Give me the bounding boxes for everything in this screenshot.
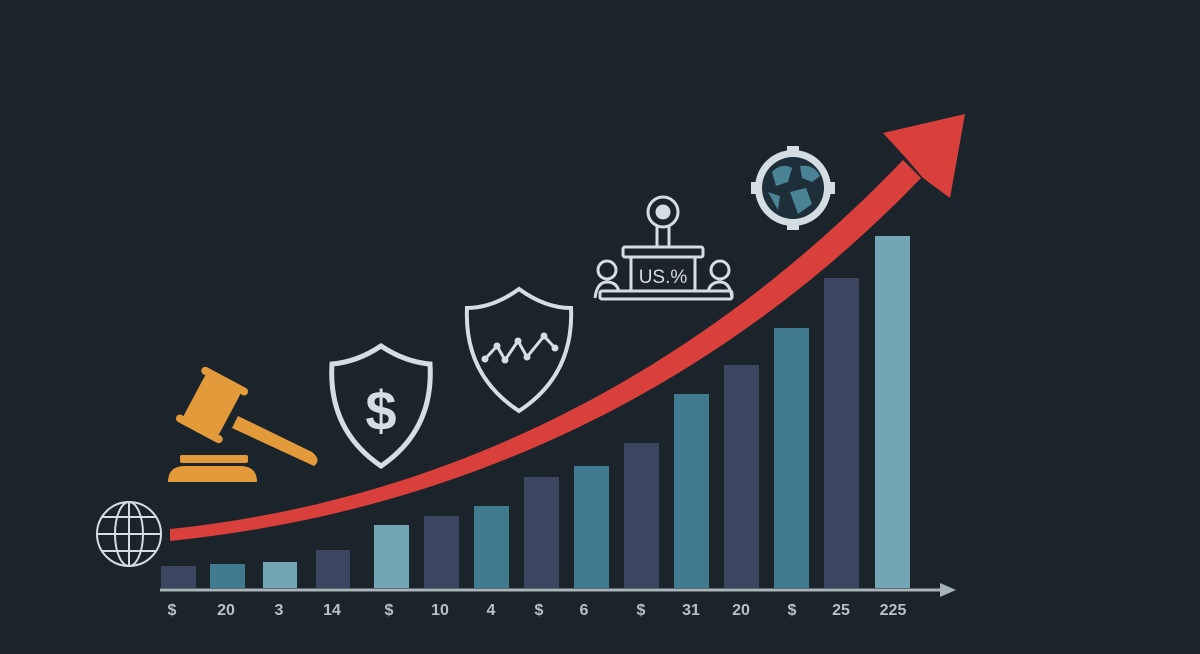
icon: stamp US.% with people: US.%	[639, 267, 687, 288]
axis labels: $	[637, 602, 646, 619]
icon: globe in gear	[751, 146, 835, 230]
icon: stamp US.% with people	[595, 197, 732, 299]
axis labels: 4	[487, 602, 496, 619]
bar chart	[161, 236, 910, 588]
axis labels: $	[788, 602, 797, 619]
axis labels: $	[385, 602, 394, 619]
icon: shield with dollar: $	[365, 379, 397, 442]
axis labels: 25	[832, 602, 850, 619]
axis labels: 10	[431, 602, 449, 619]
icon: wireframe globe	[97, 502, 161, 566]
red growth arrow	[170, 114, 965, 541]
axis labels: 6	[580, 602, 589, 619]
axis labels: 20	[217, 602, 235, 619]
axis labels: 14	[323, 602, 341, 619]
axis labels: 20	[732, 602, 750, 619]
axis labels: 3	[275, 602, 284, 619]
x axis with arrow	[160, 583, 956, 597]
axis labels: $	[168, 602, 177, 619]
axis labels	[168, 602, 906, 619]
axis labels: 31	[682, 602, 700, 619]
icon: gavel	[168, 365, 318, 482]
icon: shield with trend line	[467, 289, 571, 411]
axis labels: $	[535, 602, 544, 619]
icon: shield with dollar	[332, 346, 430, 466]
axis labels: 225	[880, 602, 906, 619]
